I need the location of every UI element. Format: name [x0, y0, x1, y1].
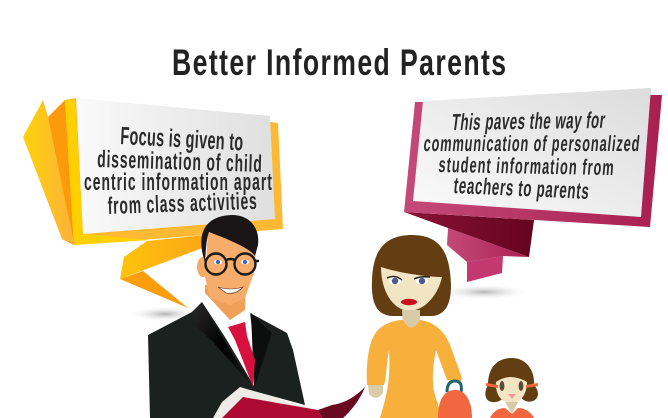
- neck: [205, 285, 245, 320]
- illustration: woman: [367, 235, 472, 418]
- bubble text: from class activities: [107, 188, 257, 220]
- left lapel: [192, 303, 253, 387]
- eyes: [387, 276, 430, 284]
- panel: yellow speech bubble: [23, 98, 283, 322]
- neck: [505, 402, 518, 414]
- red book: [213, 387, 365, 418]
- neck: [402, 310, 420, 330]
- bubble text: centric information apart: [84, 169, 272, 196]
- bubble text: dissemination of child: [97, 146, 262, 178]
- illustration: girl: [485, 358, 538, 418]
- red tie: [228, 322, 255, 387]
- suit: [148, 302, 305, 418]
- bubble text: [84, 123, 272, 220]
- face: [496, 377, 527, 403]
- pink nose: [508, 394, 516, 399]
- bubble frame: [65, 98, 283, 245]
- right lapel: [251, 313, 272, 386]
- title: Better Informed Parents: [172, 42, 506, 83]
- left folds: [23, 100, 74, 245]
- orange handbag: [438, 381, 472, 418]
- face: [381, 267, 442, 311]
- bubble text: Focus is given to: [120, 123, 244, 157]
- hair: [372, 235, 451, 316]
- panel: pink speech bubble: [404, 88, 662, 300]
- bubble text: teachers to parents: [452, 172, 590, 204]
- bubble tail: [120, 235, 205, 308]
- dress: [367, 320, 462, 418]
- glasses: [205, 254, 259, 274]
- shadow under yellow bubble: [127, 306, 203, 322]
- hand: [368, 385, 383, 398]
- bubble text: [422, 108, 641, 204]
- bubble frame: [404, 95, 662, 227]
- shirt collar: [202, 298, 255, 386]
- bubble text: This paves the way for: [450, 108, 607, 136]
- shadow under pink bubble: [436, 284, 532, 300]
- bubble text: student information from: [438, 152, 615, 180]
- head: [197, 215, 259, 305]
- illustration: man with glasses: [148, 215, 365, 418]
- eyes: [500, 381, 523, 391]
- red lips: [401, 299, 417, 305]
- smile: [218, 287, 243, 293]
- eyes: [214, 260, 249, 264]
- white panel: [76, 98, 275, 234]
- hair: [201, 215, 258, 262]
- orange top: [490, 408, 534, 418]
- bubble text: communication of personalized: [422, 132, 641, 156]
- hair ties: [486, 383, 538, 388]
- white panel: [413, 88, 651, 217]
- ribbon folds: [404, 212, 534, 282]
- hair: [485, 358, 538, 402]
